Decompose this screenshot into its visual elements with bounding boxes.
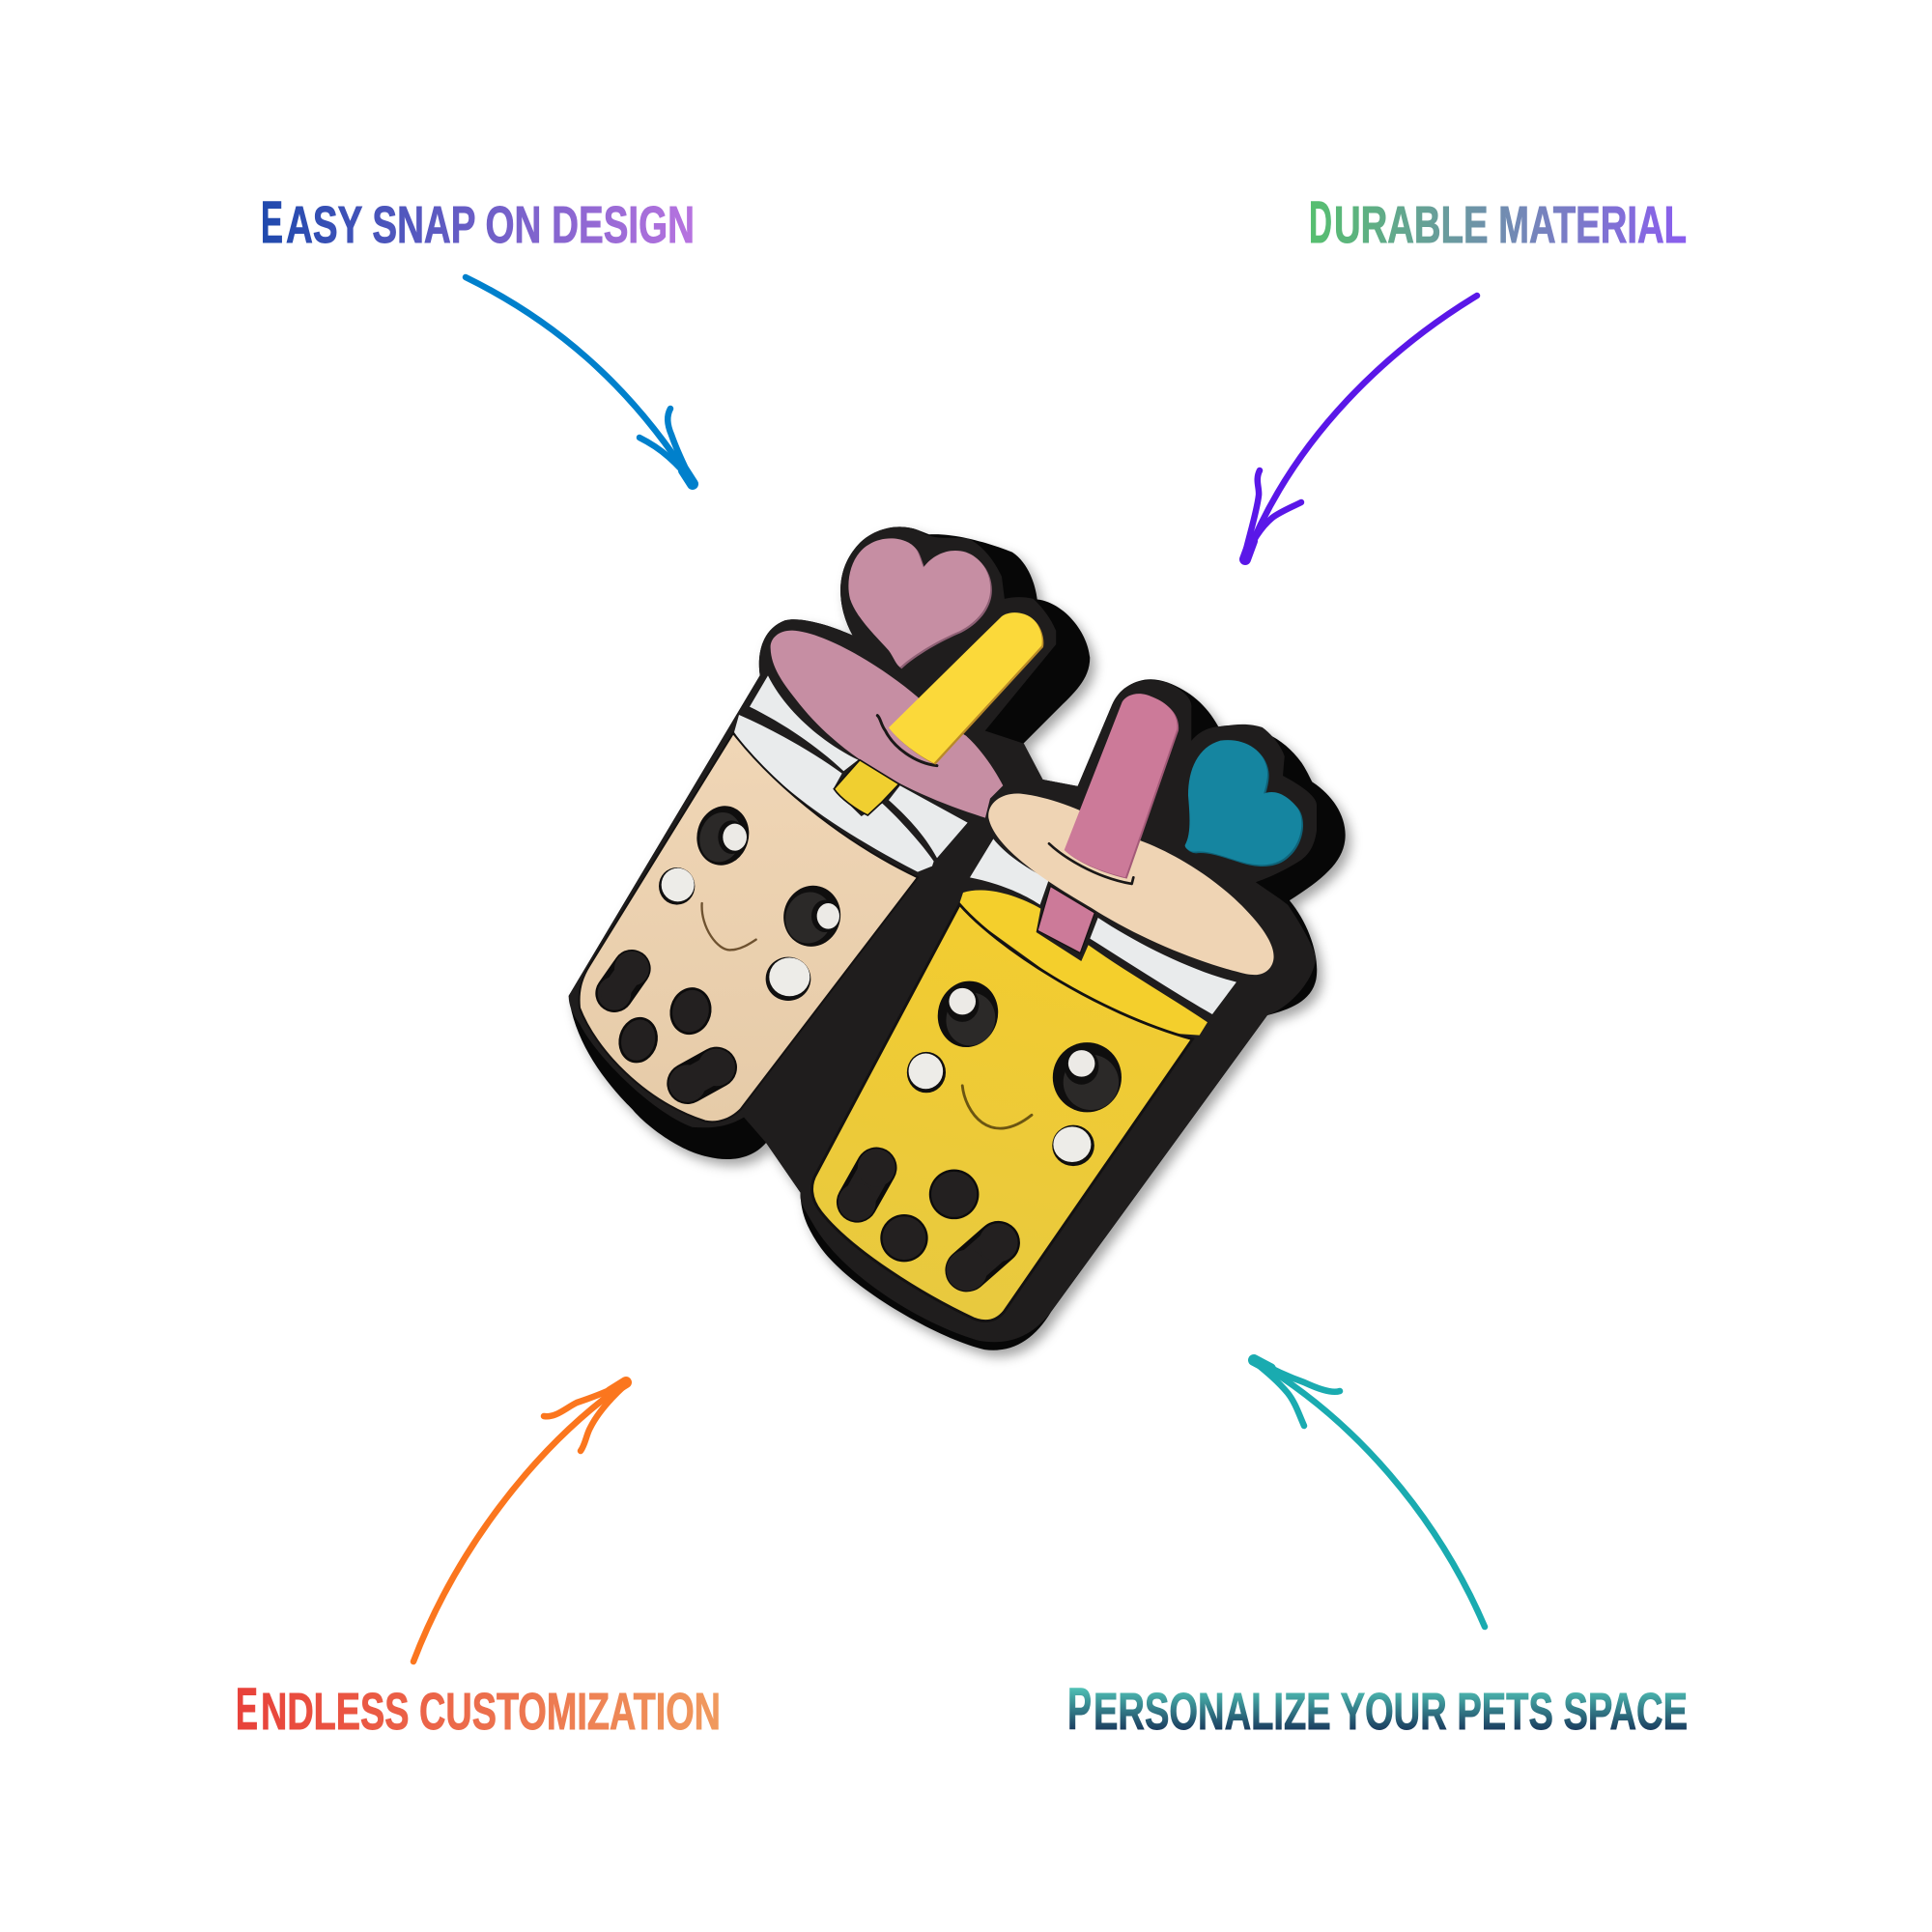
icon: blue heart <box>1186 742 1303 867</box>
left cup boba pearls <box>598 952 735 1102</box>
left eye <box>691 800 755 871</box>
heading: Easy snap on design: E <box>261 189 283 255</box>
right eye <box>777 879 847 952</box>
heading: Endless customization <box>236 1676 721 1742</box>
left cup face <box>659 800 847 1001</box>
heading: Easy snap on design: ASY SNAP ON DESIGN <box>286 196 695 254</box>
right cup white band <box>970 838 1236 1014</box>
left cup straw <box>891 614 1043 765</box>
heading: Personalize your pets space <box>1067 1676 1688 1742</box>
left cup lid <box>771 631 1003 818</box>
right cup body <box>812 904 1192 1321</box>
icon: pink heart <box>850 540 992 668</box>
cheeks <box>659 867 695 905</box>
right cup left eye <box>930 975 1006 1054</box>
right cup cheeks <box>907 1052 946 1093</box>
smile <box>702 903 756 950</box>
right cup <box>812 694 1303 1321</box>
product: boba cup charm <box>569 526 1346 1350</box>
left cup body <box>580 733 918 1122</box>
heading: Easy snap on design <box>261 189 695 255</box>
right cup boba pearls <box>838 1149 1018 1291</box>
right cup yellow strip <box>958 891 1208 1036</box>
heading: Personalize your pets space: P <box>1067 1676 1092 1742</box>
right cup smile <box>962 1086 1032 1128</box>
arrow: orange pointing to charm <box>413 1382 626 1662</box>
left cup straw stub <box>834 760 899 815</box>
heading: Endless customization: E <box>236 1676 258 1742</box>
right cup lid <box>988 793 1274 975</box>
heading: Endless customization: NDLESS CUSTOMIZATION <box>261 1683 721 1741</box>
arrow: teal pointing to charm <box>1254 1360 1485 1627</box>
lid slit <box>877 716 937 766</box>
right cup straw <box>1065 695 1179 879</box>
left cup <box>580 538 1043 1122</box>
arrow: purple pointing to charm <box>1244 296 1477 559</box>
arrow: blue pointing to charm <box>466 277 693 484</box>
left cup white band <box>734 675 968 872</box>
heading: Durable material: URABLE MATERIAL <box>1334 196 1687 254</box>
lid slit <box>1049 843 1133 884</box>
right cup face <box>907 975 1122 1166</box>
right cup straw stub <box>1037 886 1094 953</box>
charm base with shadow <box>569 526 1346 1350</box>
right cup right eye <box>1053 1042 1122 1112</box>
heading: Durable material: D <box>1309 189 1332 255</box>
heading: Durable material <box>1309 189 1687 255</box>
heading: Personalize your pets space: ERSONALIZE YOUR PETS SPACE <box>1094 1683 1688 1741</box>
